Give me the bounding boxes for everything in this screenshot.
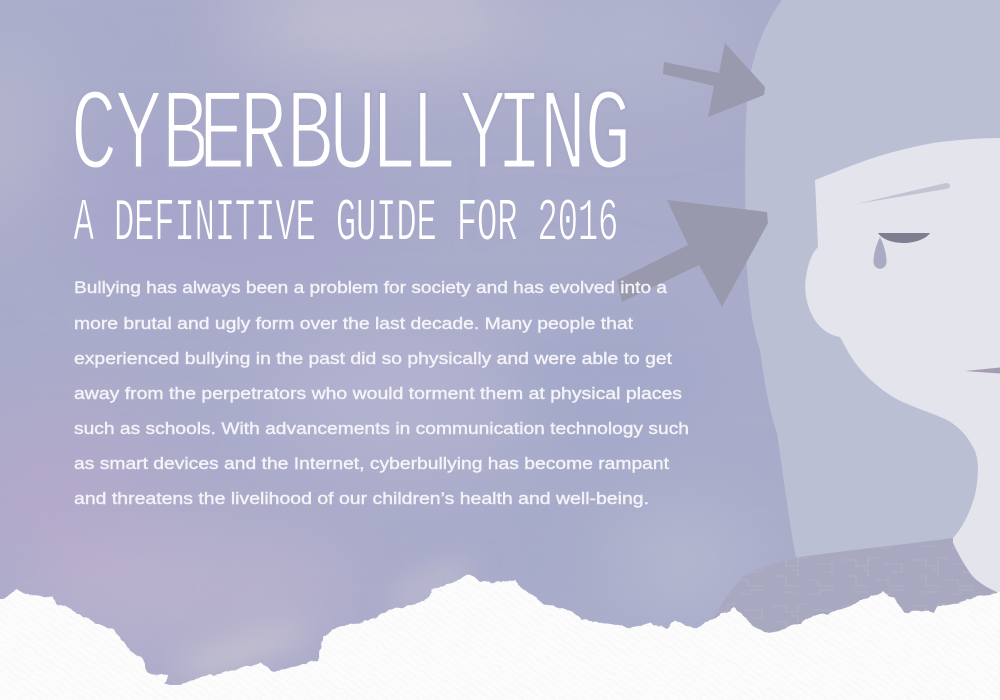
body paragraph: Bullying has always been a problem for society and has evolved into a	[74, 278, 668, 297]
face and neck	[805, 138, 1000, 600]
body paragraph: as smart devices and the Internet, cyberbullying has become rampant	[74, 454, 669, 473]
body paragraph: away from the perpetrators who would torment them at physical places	[74, 384, 682, 403]
mouth	[965, 368, 1000, 374]
illustration: crying figure	[714, 0, 1000, 650]
body paragraph: more brutal and ugly form over the last decade. Many people that	[74, 314, 633, 333]
shoulder	[714, 538, 1000, 650]
tear	[874, 237, 886, 269]
body paragraph: and threatens the livelihood of our children’s health and well-being.	[74, 489, 649, 508]
arrow: lower	[617, 200, 768, 307]
closed eye	[878, 233, 930, 243]
subtitle: A DEFINITIVE GUIDE FOR 2016	[74, 189, 618, 258]
torn paper edge	[0, 575, 1000, 700]
body paragraph: experienced bullying in the past did so physically and were able to get	[74, 349, 672, 368]
hair	[745, 0, 1000, 562]
arrow: upper	[663, 43, 765, 117]
body paragraph: such as schools. With advancements in communication technology such	[74, 419, 689, 438]
title: CYBERBULLYING	[70, 71, 631, 203]
body paragraph	[74, 278, 689, 508]
eyebrow	[856, 183, 950, 204]
